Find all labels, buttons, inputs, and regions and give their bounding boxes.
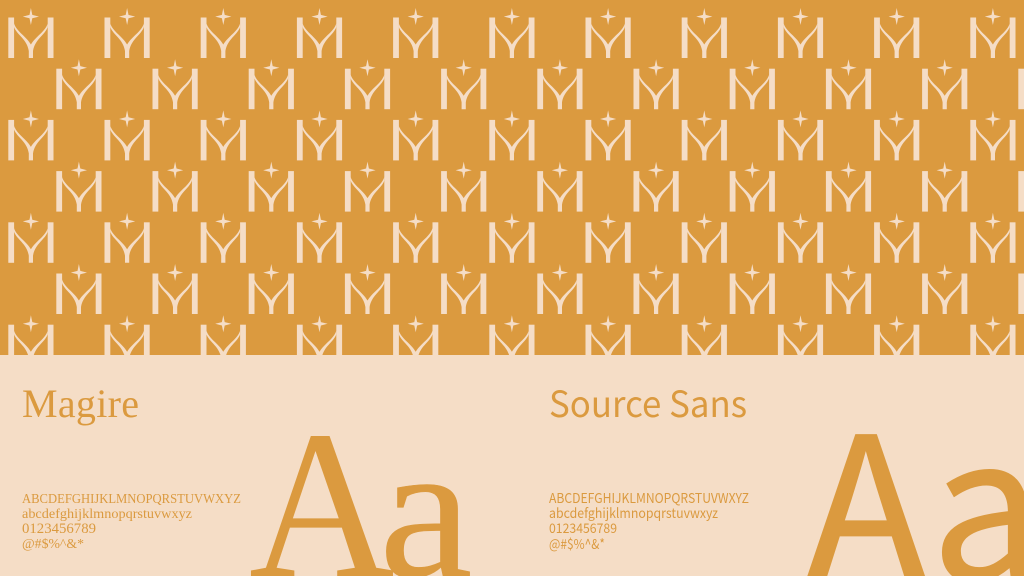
Source Sans character set: ABCDEFGHIJKLMNOPQRSTUVWXYZ <box>549 487 749 507</box>
Magire character set <box>22 492 241 552</box>
Source Sans character set <box>549 493 748 552</box>
Source Sans character set: 0123456789 <box>549 517 617 537</box>
Source Sans character set: @#$%^&* <box>549 533 605 553</box>
Magire character set: @#$%^&* <box>22 537 84 552</box>
panel: monogram pattern <box>0 0 1024 365</box>
Source Sans character set: abcdefghijklmnopqrstuvwxyz <box>549 502 719 522</box>
Magire character set: abcdefghijklmnopqrstuvwxyz <box>22 507 192 522</box>
Magire character set: 0123456789 <box>22 521 96 537</box>
monogram rows <box>8 8 1024 365</box>
heading: Source Sans: Source Sans <box>549 376 747 428</box>
Magire character set: ABCDEFGHIJKLMNOPQRSTUVWXYZ <box>22 492 241 507</box>
panel: typography specimens <box>22 390 1024 576</box>
heading: Magire: Magire <box>22 381 139 426</box>
